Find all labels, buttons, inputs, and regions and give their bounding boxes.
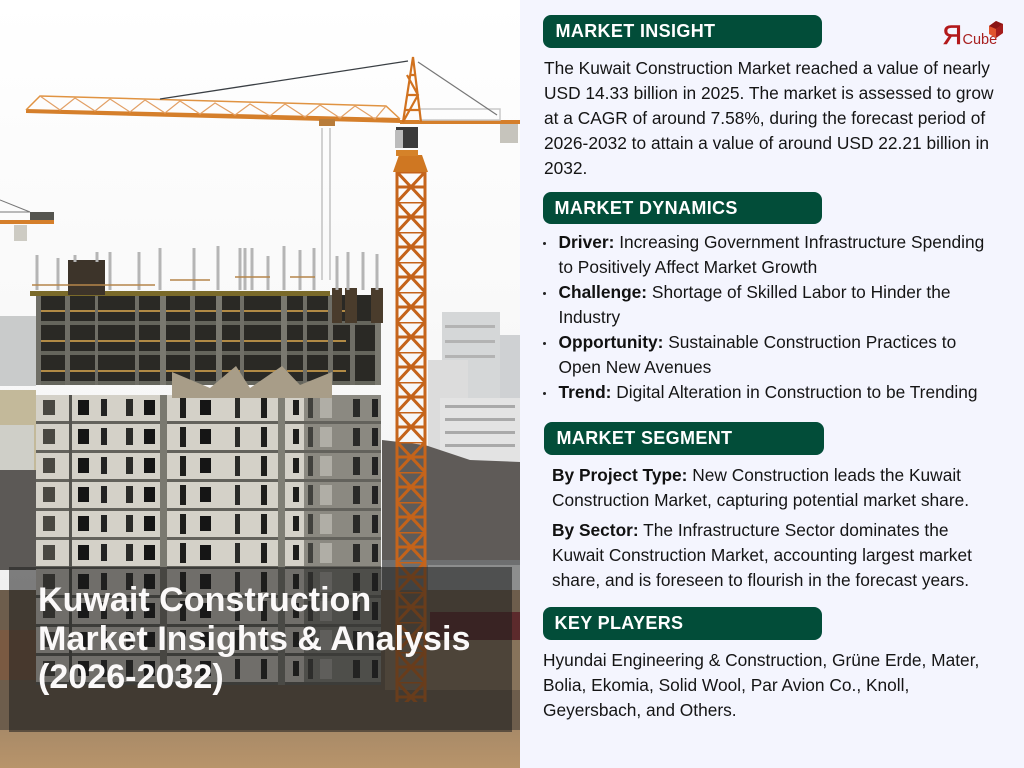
title: Market Insights & Analysis: [38, 620, 470, 658]
distant city blocks: [0, 312, 520, 475]
market dynamics list: Trend: Digital Alteration in Construction to be Trending: [558, 382, 977, 402]
market dynamics list: Opportunity: Sustainable Construction Practices to: [558, 332, 956, 352]
second crane fragment: [0, 200, 54, 241]
market insight text: 2026-2032 to attain a value of around USD 22.21 billion in: [544, 133, 989, 153]
logo: RCube: [942, 20, 1003, 48]
heading: market segment: [544, 422, 824, 455]
low site buildings and ground: [382, 560, 520, 620]
title: Kuwait Construction: [38, 581, 371, 619]
tree line: [382, 440, 520, 570]
market segment: sector: Kuwait Construction Market, accounting largest market: [552, 545, 972, 565]
market insight text: at a CAGR of around 7.58%, during the forecast period of: [544, 108, 985, 128]
market insight text: The Kuwait Construction Market reached a value of nearly: [544, 58, 990, 78]
market dynamics list: Industry: [558, 307, 620, 327]
market segment: project type: Construction Market, capturing potential market share.: [552, 490, 969, 510]
heading: market dynamics: [543, 192, 822, 224]
title: (2026-2032): [38, 658, 224, 696]
photo: construction site with tower cranes: [0, 0, 520, 768]
market dynamics list: Challenge: Shortage of Skilled Labor to Hinder the: [558, 282, 951, 302]
market segment: sector: [552, 520, 972, 590]
market dynamics list: to Positively Affect Market Growth: [558, 257, 817, 277]
key players text: Hyundai Engineering & Construction, Grüne Erde, Mater,: [543, 650, 979, 670]
market segment: project type: By Project Type: New Construction leads the Kuwait: [552, 465, 961, 485]
logo cube icon: [989, 21, 1003, 38]
key players text: Geyersbach, and Others.: [543, 700, 737, 720]
key players text: [543, 650, 979, 720]
heading: key players: KEY PLAYERS: [554, 613, 683, 633]
heading: market insight: [543, 15, 822, 48]
market insight text: [544, 58, 994, 178]
market dynamics list: Driver: Increasing Government Infrastructure Spending: [558, 232, 984, 252]
logo word: Cube: [962, 32, 997, 48]
key players text: Bolia, Ekomia, Solid Wool, Par Avion Co., Knoll,: [543, 675, 909, 695]
building under construction: [30, 246, 383, 685]
market segment: sector: share, and is foreseen to flourish in the forecast years.: [552, 570, 969, 590]
title: [38, 581, 470, 696]
market segment: sector: By Sector: The Infrastructure Sector dominates the: [552, 520, 948, 540]
market insight text: USD 14.33 billion in 2025. The market is assessed to grow: [544, 83, 993, 103]
dark title band: [9, 567, 512, 732]
market dynamics list: [543, 232, 984, 402]
heading: market segment: MARKET SEGMENT: [556, 428, 732, 448]
heading: market dynamics: MARKET DYNAMICS: [554, 198, 738, 218]
market dynamics list: Open New Avenues: [558, 357, 711, 377]
tower crane: [26, 57, 520, 702]
market segment: project type: [552, 465, 969, 510]
heading: key players: [543, 607, 822, 640]
heading: market insight: MARKET INSIGHT: [556, 21, 715, 41]
market insight text: 2032.: [544, 158, 587, 178]
right panel background: [520, 0, 1024, 768]
